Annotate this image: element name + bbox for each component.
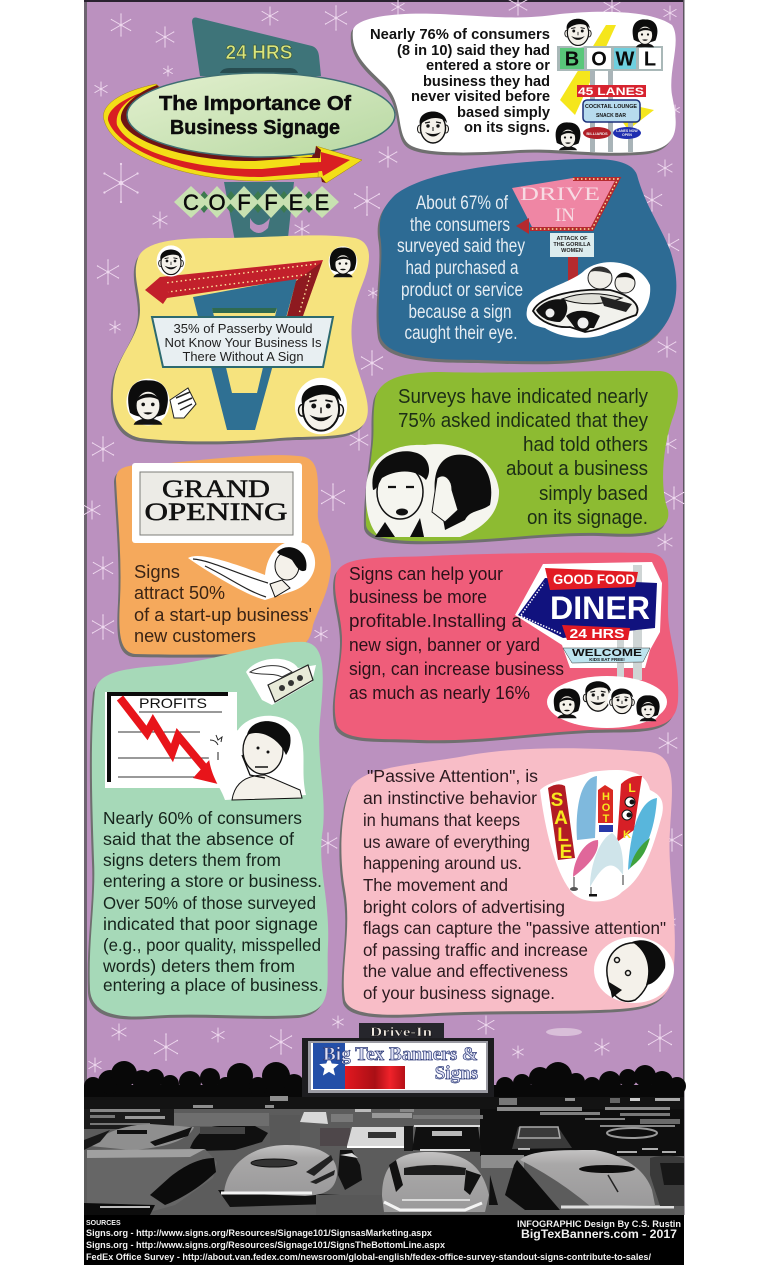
icon: advertising flags: K [623,829,631,841]
statistic text: new sign, banner or yard [349,635,540,655]
profits chart: PROFITS [139,695,207,711]
icon: diner sign [515,562,662,690]
statistic text: sign, can increase business [349,659,564,679]
teal sign post [192,18,321,247]
statistic text: Over 50% of those surveyed [103,893,316,913]
statistic text [349,564,564,703]
front row cars [84,1145,684,1215]
sources: Signs.org - http://www.signs.org/Resources/Signage101/SignsasMarketing.aspx [86,1228,432,1238]
screen sign: Signs [435,1063,478,1084]
screen sign: Big Tex Banners & [323,1044,478,1065]
icon: bowl sign: COCKTAIL LOUNGE [585,104,637,110]
statistic text [370,27,550,136]
icon: family faces [547,676,667,728]
sources: SOURCES [86,1220,121,1227]
statistic text: of your business signage. [363,983,555,1003]
icon: advertising flags: T [603,813,610,825]
statistic text: about a business [506,458,648,480]
icon: bowl sign [557,25,663,152]
icon: woman top right [329,246,357,278]
icon: advertising flags [540,770,663,902]
icon: diner sign: KIDS EAT FREE! [589,657,625,662]
coffee diamonds: E [289,190,303,215]
middle row cars [84,1124,676,1156]
statistic text: flags can capture the "passive attention" [363,918,666,938]
sources: FedEx Office Survey - http://about.van.fedex.com/newsroom/global-english/fedex-office-survey-standout-signs-contribute-to-sales/ [86,1252,651,1262]
teal v sign [193,278,297,430]
icon: drive-in sign: ATTACK OF [557,236,588,242]
icon: man top left [157,245,185,277]
title ellipse [127,73,395,157]
title sign [103,18,395,247]
panel: 60% absence of signs [88,642,328,1020]
icon: diner sign: WELCOME [572,648,642,659]
statistic text: (e.g., poor quality, misspelled [103,935,321,955]
statistic text [398,386,648,529]
coffee diamonds: E [315,190,329,215]
icon: bowl sign: O [591,48,607,70]
icon: excited man [594,937,674,1003]
statistic text: words) deters them from [102,956,295,976]
statistic text: (8 in 10) said they had [397,43,550,59]
inner yellow panel [212,308,277,313]
icon: drive-in sign: WOMEN [561,248,583,254]
statistic text: the consumers [410,215,510,236]
statistic text: said that the absence of [103,829,294,849]
red arrow [145,260,323,316]
panel: passive attention [339,748,675,1018]
credit: INFOGRAPHIC Design By C.S. Rustin [517,1219,681,1229]
icon: drive-in sign: DRIVE [520,184,600,205]
icon: bowl sign: L [644,48,656,70]
icon: bowl sign: OPEN [622,133,632,137]
statistic text [134,562,312,646]
title text [159,93,351,139]
tree line [84,1061,686,1099]
statistic text: of a start-up business' [134,605,312,625]
statistic text: Nearly 76% of consumers [370,27,550,43]
icon: bowl sign: LANES NOW [616,129,638,133]
icon: drive-in sign [512,178,618,283]
statistic text: entering a store or business. [103,871,322,891]
statistic text: had purchased a [406,258,519,279]
distant cars [90,1096,680,1125]
statistic text: 75% asked indicated that they [398,410,648,432]
statistic text: us aware of everything [363,832,530,852]
panel: 67% of consumers [377,159,676,364]
poster background [84,0,684,1265]
statistic text: entering a place of business. [103,975,323,995]
swoosh arrow body [103,84,362,183]
panel: 35% passerby [111,235,369,444]
coffee diamonds: F [264,190,278,215]
panel: 50% of new customers [114,455,331,658]
caption box [152,317,333,367]
statistic text: based simply [457,105,550,121]
24 hrs label: 24 HRS [226,42,292,64]
statistic text: signs deters them from [103,850,281,870]
statistic text: product or service [401,280,523,301]
statistic text [397,193,525,344]
statistic text: indicated that poor signage [103,914,318,934]
statistic text: on its signs. [464,120,550,136]
icon: diner sign: GOOD FOOD [553,571,635,587]
title text: The Importance Of [159,93,351,115]
statistic text: had told others [523,434,648,456]
icon: drive-in sign: IN [555,205,575,226]
panel: 75% told others [364,371,678,544]
icon: whispering couple [366,444,499,537]
credit: BigTexBanners.com - 2017 [521,1227,677,1241]
icon: bowl sign: B [565,48,579,70]
statistic text: of passing traffic and increase [363,940,588,960]
panel: 16% more profitable [333,553,678,743]
statistic text: Signs can help your [349,564,503,584]
profits chart [105,692,237,788]
statistic text: new customers [134,626,256,646]
icon: woman with money [126,379,196,425]
icon: smiling man [415,106,451,146]
statistic text: never visited before [411,89,550,105]
statistic text: Signs [134,562,180,582]
starry sky pattern [84,0,684,1072]
icon: bowl sign: SNACK BAR [596,113,626,119]
icon: diner sign: DINER [550,590,650,626]
lot ground [84,1097,684,1215]
grand opening banner [132,463,302,543]
icon: advertising flags: A [554,808,568,829]
icon: woman portrait [554,121,582,151]
statistic text: attract 50% [134,583,225,603]
statistic text: surveyed said they [397,236,525,257]
statistic text: an instinctive behavior [363,788,537,808]
statistic text: simply based [539,483,648,505]
statistic text: "Passive Attention", is [367,766,538,786]
credit [517,1219,681,1241]
icon: worried man [208,716,306,800]
screen sign [302,1023,494,1097]
icon: advertising flags: L [557,825,569,846]
coffee diamonds [174,186,339,218]
icon: flying money [246,659,316,705]
icon: drive-in sign: THE GORILLA [553,242,591,248]
icon: bowl sign: BILLIARDS [586,131,608,136]
coffee diamonds: O [208,190,226,215]
statistic text: Surveys have indicated nearly [398,386,648,408]
caption box: Not Know Your Business Is [164,335,322,350]
swoosh arrow head [300,146,362,183]
icon: advertising flags: L [628,781,636,795]
statistic text: caught their eye. [404,323,518,344]
statistic text: because a sign [408,302,512,323]
statistic text: entered a store or [426,58,550,74]
grand opening banner: GRAND [162,476,270,503]
statistic text: The movement and [363,875,508,895]
statistic text [102,808,323,995]
icon: advertising flags: H [602,791,610,803]
statistic text: the value and effectiveness [363,961,568,981]
statistic text: About 67% of [416,193,509,214]
icon: diner sign: 24 HRS [570,626,625,641]
panel: 76% of consumers [351,12,676,156]
icon: bowl sign: 45 LANES [578,86,644,98]
footer bar [84,1215,684,1265]
statistic text: as much as nearly 16% [349,683,530,703]
drive-in scene [84,1023,686,1215]
icon: advertising flags: S [551,790,563,811]
title text: Business Signage [170,117,340,139]
statistic text: profitable.Installing a [349,611,523,631]
sources [86,1220,651,1262]
statistic text: business they had [423,74,550,90]
statistic text: business be more [349,587,487,607]
sources: Signs.org - http://www.signs.org/Resources/Signage101/SignsTheBottomLine.aspx [86,1240,445,1250]
coffee diamonds: F [237,190,251,215]
icon: woman face [632,18,658,48]
icon: advertising flags: O [602,802,611,814]
screen sign: Drive-In [370,1024,433,1039]
icon: advertising flags: E [560,842,572,863]
statistic text: bright colors of advertising [363,897,565,917]
statistic text: on its signage. [527,507,648,529]
statistic text: Nearly 60% of consumers [103,808,302,828]
icon: bowl sign: W [616,48,635,70]
grand opening banner: OPENING [144,499,288,526]
statistic text: happening around us. [363,853,522,873]
caption box: There Without A Sign [182,349,304,364]
icon: couple in car [527,262,650,338]
statistic text [363,766,666,1003]
coffee diamonds: C [183,190,199,215]
icon: woman presenting [188,541,315,600]
caption box: 35% of Passerby Would [174,321,312,336]
statistic text: in humans that keeps [363,810,520,830]
icon: man face [563,14,593,48]
icon: grinning man [295,378,347,434]
